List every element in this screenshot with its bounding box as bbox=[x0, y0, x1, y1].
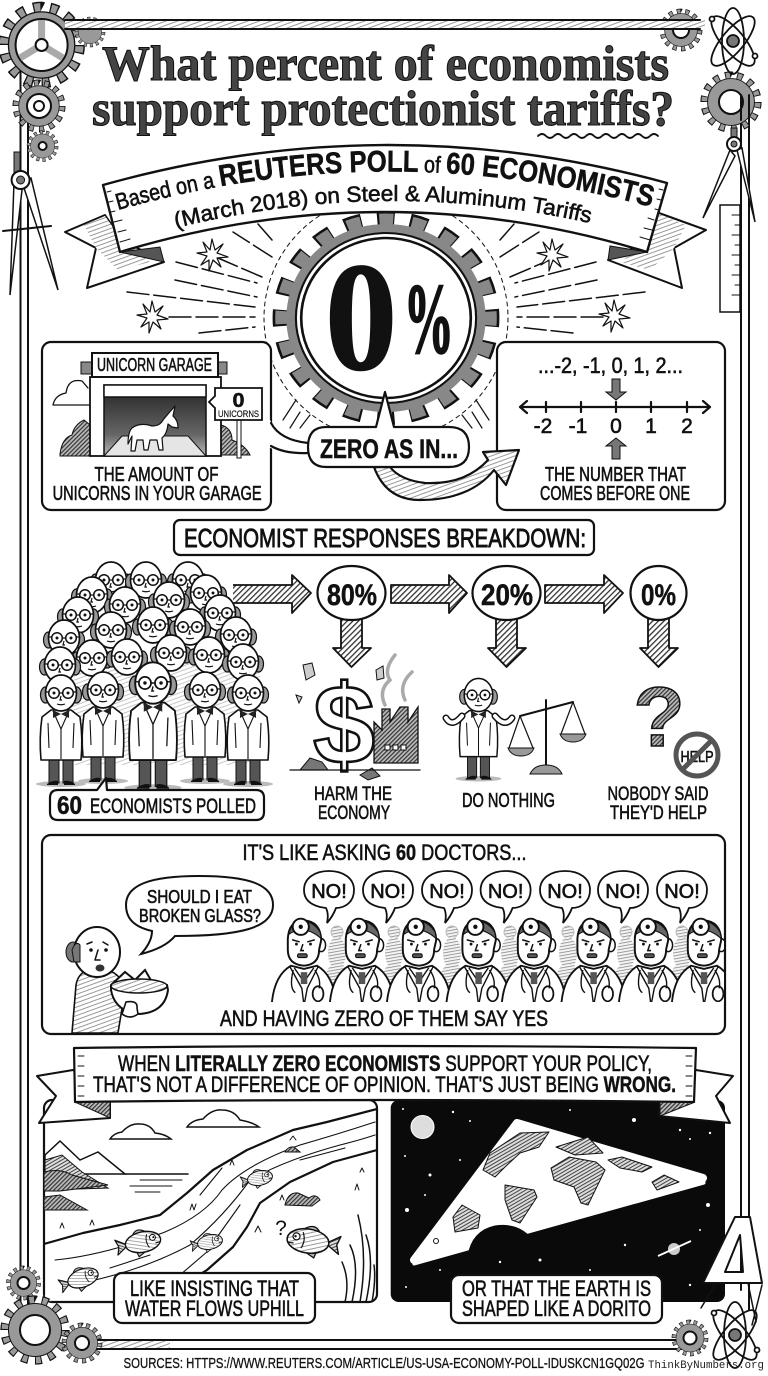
bite mark bbox=[468, 1225, 536, 1256]
panel heading: IT'S LIKE ASKING 60 DOCTORS... bbox=[242, 840, 526, 865]
NO speech bubbles: NO! bbox=[429, 881, 465, 903]
icon: question mark and no help sign bbox=[633, 670, 718, 776]
panel: number line: ...-2, -1, 0, 1, 2... bbox=[538, 353, 683, 378]
panel: unicorn garage bbox=[42, 342, 271, 510]
caption: dorito earth: OR THAT THE EARTH IS bbox=[462, 1276, 651, 1301]
percent circle: 80%: 80% bbox=[327, 579, 377, 612]
unicorn bbox=[128, 406, 178, 451]
heading: economist responses breakdown bbox=[174, 520, 594, 555]
saturn bbox=[658, 1241, 691, 1256]
cloud bbox=[53, 380, 90, 405]
panel: number line: 1 bbox=[645, 415, 657, 438]
label: harm the economy: ECONOMY bbox=[318, 803, 390, 824]
speech bubble: should I eat broken glass bbox=[126, 876, 273, 954]
fish in river bbox=[114, 1229, 162, 1258]
grass tufts bbox=[60, 1136, 364, 1232]
caption: water flows uphill: WATER FLOWS UPHILL bbox=[125, 1296, 304, 1321]
NO speech bubbles: NO! bbox=[311, 881, 347, 903]
label: 60 economists polled: ECONOMISTS POLLED bbox=[90, 795, 256, 818]
horizontal flow arrows bbox=[233, 575, 623, 613]
wavy underline under tariffs bbox=[538, 134, 658, 138]
seaweed bbox=[342, 1215, 375, 1302]
icon: shrugging economist and scales bbox=[446, 678, 586, 781]
caption: dorito earth: SHAPED LIKE A DORITO bbox=[462, 1296, 651, 1321]
central gear with 0% bbox=[280, 218, 492, 418]
title bbox=[92, 35, 674, 136]
zero unicorns sign bbox=[237, 420, 241, 458]
heading: economist responses breakdown: ECONOMIST RESPONSES BREAKDOWN: bbox=[184, 523, 586, 553]
icon: question mark and no help sign: ? bbox=[633, 670, 685, 764]
big fish bbox=[286, 1226, 342, 1259]
title: support protectionist tariffs? bbox=[92, 80, 674, 136]
top ribbon banner bbox=[64, 144, 707, 289]
bottom right compass points bbox=[701, 1283, 762, 1325]
moon bbox=[411, 1116, 434, 1138]
percent circle: 80% bbox=[318, 566, 386, 620]
NO speech bubbles bbox=[304, 871, 707, 923]
NO speech bubbles: NO! bbox=[370, 881, 406, 903]
icon: broken dollar and factory bbox=[290, 655, 420, 787]
label: harm the economy: HARM THE bbox=[314, 784, 392, 805]
banner line two: (March 2018) on Steel & Aluminum Tariffs bbox=[175, 184, 592, 232]
sunburst rays around gear bbox=[127, 196, 645, 440]
scene: water flows uphill: ? bbox=[275, 1217, 287, 1240]
caption: THE AMOUNT OF bbox=[94, 464, 218, 486]
zero as in bubble bbox=[270, 392, 469, 467]
panel: unicorn garage: UNICORNS bbox=[218, 409, 259, 420]
stars bbox=[402, 1108, 711, 1288]
percent circle: 0%: 0% bbox=[641, 579, 676, 612]
label: 60 economists polled bbox=[50, 778, 264, 820]
panel: unicorn garage: UNICORN GARAGE bbox=[97, 355, 212, 375]
watermark: ThinkByNumbers.org bbox=[648, 1360, 764, 1372]
caption: water flows uphill: LIKE INSISTING THAT bbox=[130, 1276, 299, 1301]
mountains bbox=[45, 1141, 125, 1174]
scene: water flows uphill bbox=[44, 1100, 377, 1302]
panel: unicorn garage: 0 bbox=[232, 390, 244, 412]
panel: doctors analogy bbox=[42, 835, 736, 1034]
percent circle: 0% bbox=[630, 566, 686, 620]
crowd of economists bbox=[36, 562, 273, 791]
NO speech bubbles: NO! bbox=[605, 881, 641, 903]
patient with bowl of glass bbox=[66, 927, 168, 1033]
gears and atom, bottom corners bbox=[6, 1269, 763, 1368]
row of doctors bbox=[272, 919, 736, 1006]
clouds bbox=[110, 1124, 171, 1139]
panel: number line: THE NUMBER THAT bbox=[545, 464, 686, 486]
background crowd of doctors bbox=[326, 926, 690, 986]
dorito bbox=[414, 1123, 704, 1264]
scene: dorito earth bbox=[391, 1100, 725, 1302]
panel: number line bbox=[497, 342, 725, 510]
zero as in bubble: ZERO AS IN... bbox=[320, 434, 458, 464]
label: nobody said they'd help: NOBODY SAID bbox=[608, 784, 708, 805]
banner line one: WHEN LITERALLY ZERO ECONOMISTS SUPPORT YOUR POLICY, bbox=[118, 1051, 652, 1076]
banner line two: THAT'S NOT A DIFFERENCE OF OPINION. THAT'S JUST BEING WRONG. bbox=[93, 1072, 676, 1097]
right compass and ruler bbox=[703, 128, 755, 312]
speech bubble: should I eat broken glass: BROKEN GLASS? bbox=[139, 906, 261, 926]
panel: number line: -1 bbox=[569, 415, 587, 438]
panel: number line: -2 bbox=[534, 415, 552, 438]
decorative gears and atoms, top corners bbox=[6, 8, 761, 159]
label: nobody said they'd help: THEY'D HELP bbox=[610, 803, 707, 824]
title: What percent of economists bbox=[102, 35, 669, 91]
label: 60 economists polled: 60 bbox=[57, 792, 82, 820]
garage building bbox=[90, 377, 221, 456]
label: do nothing: DO NOTHING bbox=[462, 790, 555, 812]
garage sign bbox=[81, 362, 227, 374]
left drawing compass bbox=[3, 152, 58, 295]
caption: dorito earth bbox=[451, 1275, 662, 1323]
icon: broken dollar and factory: $ bbox=[313, 662, 375, 787]
label: harm the economy bbox=[314, 784, 392, 824]
speech bubble: should I eat broken glass: SHOULD I EAT bbox=[147, 887, 252, 907]
panel: number line: 2 bbox=[681, 415, 693, 438]
icon: question mark and no help sign: HELP bbox=[680, 749, 714, 766]
starbursts bbox=[137, 239, 630, 333]
percent circle: 20%: 20% bbox=[481, 579, 533, 612]
banner line one: Based on a REUTERS POLL of 60 ECONOMISTS bbox=[115, 150, 654, 210]
down arrows bbox=[333, 618, 678, 667]
big zero: 0 bbox=[325, 231, 397, 403]
rock bbox=[285, 1193, 320, 1206]
bushes bbox=[60, 420, 250, 456]
river bbox=[44, 1109, 377, 1302]
panel: number line: 0 bbox=[610, 415, 622, 438]
panel: unicorn garage: UNICORNS IN YOUR GARAGE bbox=[53, 483, 262, 505]
NO speech bubbles: NO! bbox=[547, 881, 583, 903]
percent circle: 20% bbox=[472, 566, 540, 620]
label: nobody said they'd help bbox=[608, 784, 708, 824]
panel: number line: COMES BEFORE ONE bbox=[540, 483, 690, 505]
curved arrow to number panel bbox=[374, 450, 519, 500]
central gear with 0%: % bbox=[404, 264, 454, 374]
caption: water flows uphill bbox=[114, 1273, 315, 1323]
panel footer text: AND HAVING ZERO OF THEM SAY YES bbox=[220, 1006, 548, 1031]
set square bottom right bbox=[703, 1217, 762, 1283]
NO speech bubbles: NO! bbox=[488, 881, 523, 903]
bottom ribbon banner bbox=[37, 1046, 733, 1123]
NO speech bubbles: NO! bbox=[664, 881, 700, 903]
